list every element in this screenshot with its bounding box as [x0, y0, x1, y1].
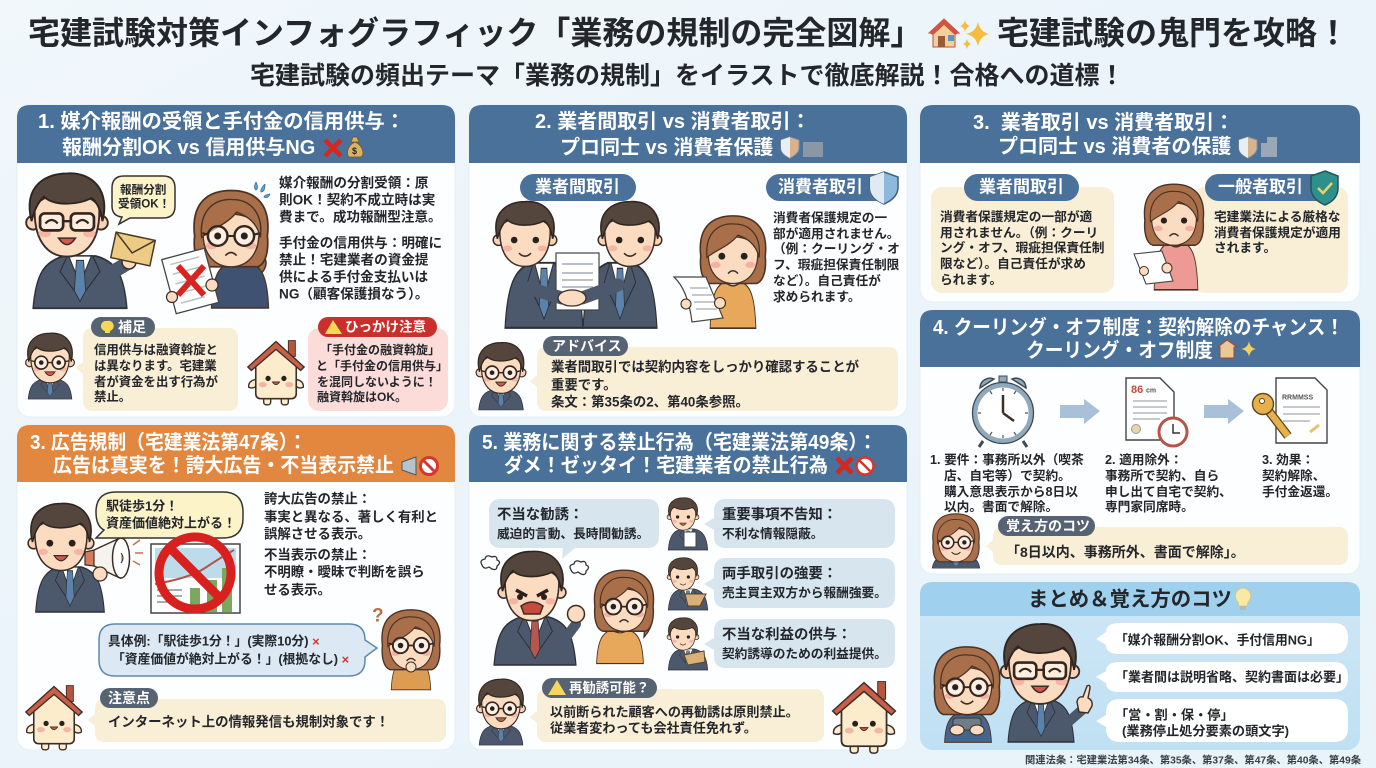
box: business transactions: ング・オフ、瑕疵担保責任制 [940, 240, 1104, 255]
heading: panel 4 [920, 310, 1360, 367]
item: improper benefit: 契約誘導のための利益提供。 [722, 646, 887, 661]
text block: step 3: 契約解除、 [1262, 468, 1325, 483]
illustration: puzzled woman: ? [372, 606, 384, 626]
heading: panel 3 right [920, 105, 1360, 163]
icon: alarm clock [972, 376, 1034, 447]
callout: memory tip [986, 516, 1348, 565]
illustration: consumer woman reading [674, 216, 766, 328]
illustration: woman and man pointing [934, 624, 1092, 742]
text block: exaggeration: 誤解させる表示。 [264, 526, 371, 542]
text block: step 3: 手付金返還。 [1262, 484, 1338, 499]
callout: memory tip: 「8日以内、事務所外、書面で解除」。 [1006, 544, 1245, 560]
callout: re-solicitation [530, 678, 824, 742]
box: business transactions [931, 174, 1114, 293]
heading: panel 3 right: プロ同士 vs 消費者の保護 [998, 135, 1231, 158]
callout: trap warning: を混同しないように！ [317, 374, 437, 389]
icon: document with clock: 86 [1131, 384, 1143, 396]
text block: exaggeration [264, 490, 438, 598]
speech bubble: undue solicitation: 威迫的言動、長時間勧誘。 [497, 526, 649, 541]
panel: 3 advertising [17, 425, 455, 750]
box: general consumer transactions: されます。 [1214, 241, 1276, 255]
callout: trap warning [308, 317, 448, 411]
heading: panel 2: プロ同士 vs 消費者保護 [560, 136, 773, 159]
illustration: woman with rejected document [162, 182, 270, 314]
heading: panel 1: $ [352, 146, 357, 156]
box: general consumer transactions [1193, 171, 1348, 293]
speech bubble: fee split OK: 報酬分割 [120, 182, 166, 196]
illustration: puzzled woman [372, 606, 440, 690]
text block: fee split and credit: 手付金の信用供与：明確に [279, 234, 442, 250]
heading: panel 4: クーリング・オフ制度 [1026, 338, 1213, 362]
item: material non-disclosure: 不利な情報隠蔽。 [722, 526, 824, 541]
item: improper benefit: 不当な利益の供与： [722, 625, 852, 643]
text block: step 1: 1. 要件：事務所以外（喫茶 [930, 452, 1084, 467]
speech bubble: advert claim: 駅徒歩1分！ [106, 498, 178, 514]
panel: 2 business vs consumer [469, 105, 907, 417]
label: business: 業者間取引 [535, 178, 620, 196]
item: forced dual agency: 売主買主双方から報酬強要。 [722, 585, 887, 600]
text block: consumer protection: フ、瑕疵担保責任制限 [773, 257, 900, 272]
heading: advertising [17, 425, 455, 482]
text block: step 2: 申し出て自宅で契約、 [1105, 484, 1232, 499]
speech bubble: undue solicitation: 不当な勧誘： [497, 505, 583, 523]
text block: step 2: 専門家同席時。 [1105, 499, 1194, 514]
text block: step 2: 事務所で契約、自ら [1105, 468, 1219, 483]
speech bubble: advert claim: 資産価値絶対上がる！ [106, 516, 236, 530]
callout: supplement: 信用供与は融資斡旋と [94, 342, 218, 357]
icon: key and document: RRMMSS [1282, 394, 1313, 402]
callout: concrete examples: 具体例:「駅徒歩1分！」(実際10分) × [108, 634, 320, 648]
text block: step 2: 2. 適用除外： [1105, 452, 1183, 467]
callout: re-solicitation: 従業者変わっても会社責任免れず。 [550, 720, 757, 736]
avatar: woman [932, 514, 980, 568]
text block: fee split and credit: NG（顧客保護損なう）。 [279, 286, 429, 302]
box: business transactions: られます。 [940, 273, 1002, 287]
callout: trap warning: と「手付金の信用供与」 [316, 358, 448, 373]
callout: memory tip: 覚え方のコツ [1006, 518, 1090, 534]
box: business transactions: 限など）。自己責任が求め [940, 256, 1086, 271]
item: material non-disclosure [667, 498, 895, 550]
label: consumer with shield: 消費者取引 [778, 178, 863, 196]
text block: step 1: 以内。書面で解除。 [944, 499, 1058, 514]
title: 宅建試験の鬼門を攻略！ [997, 15, 1349, 51]
footer: related laws: 関連法条：宅建業法第34条、第35条、第37条、第47条、第40条、第49条 [1025, 754, 1361, 766]
text block: fee split and credit [279, 174, 442, 302]
avatar: man [477, 679, 525, 745]
speech bubble: tip 3 [1096, 699, 1348, 742]
text block: fee split and credit: 費まで。成功報酬型注意。 [279, 208, 442, 224]
subtitle: 宅建試験の頻出テーマ「業務の規制」をイラストで徹底解説！合格への道標！ [250, 62, 1125, 90]
text block: fee split and credit: 供による手付金支払いは [279, 268, 429, 284]
callout: supplement: は異なります。宅建業 [94, 358, 217, 373]
heading: panel 5: 5. 業務に関する禁止行為（宅建業法第49条）： [482, 431, 877, 454]
avatar: man [476, 343, 526, 410]
label: consumer with shield [766, 172, 898, 204]
text block: exaggeration: 不当表示の禁止： [264, 546, 371, 562]
box: general consumer transactions: 宅建業法による厳格な [1214, 209, 1341, 224]
speech bubble: fee split OK [112, 176, 175, 224]
callout: trap warning: 融資斡旋はOK。 [317, 389, 407, 404]
heading: panel 2 [469, 105, 907, 163]
heading: panel 5: ダメ！ゼッタイ！宅建業者の禁止行為 [504, 453, 828, 477]
arrow [1204, 399, 1244, 424]
callout: advice [530, 336, 898, 411]
speech bubble: tip 2 [1096, 662, 1349, 692]
callout: concrete examples: 「資産価値が絶対上がる！」(根拠なし) × [112, 652, 349, 666]
text block: step 3 [1262, 453, 1338, 499]
callout: supplement: 者が資金を出す行為が [94, 374, 219, 389]
callout: supplement [76, 317, 238, 411]
box: business transactions: 消費者保護規定の一部が適 [940, 209, 1093, 224]
box: general consumer transactions: 一般者取引 [1218, 178, 1303, 196]
illustration: man with envelope [26, 173, 155, 308]
callout: caution: 注意点 [108, 690, 150, 706]
text block: step 3: 3. 効果： [1262, 453, 1314, 467]
avatar: man [26, 333, 74, 399]
text block: fee split and credit: 媒介報酬の分割受領：原 [279, 174, 429, 190]
text block: exaggeration: 事実と異なる、著しく有利と [264, 508, 438, 524]
callout: concrete examples [99, 624, 377, 676]
callout: supplement: 禁止。 [94, 389, 131, 404]
text block: step 1: 購入意思表示から8日以 [944, 484, 1078, 499]
panel: summary [920, 582, 1360, 750]
text block: step 2 [1105, 452, 1232, 514]
title: 宅建試験対策インフォグラフィック「業務の規制の完全図解」 [28, 15, 922, 51]
callout: advice: 条文：第35条の2、第40条参照。 [551, 394, 749, 410]
speech bubble: undue solicitation [489, 499, 659, 559]
callout: advice: アドバイス [552, 338, 622, 354]
illustration: woman with paper [1134, 184, 1204, 290]
heading: advertising: 広告は真実を！誇大広告・不当表示禁止 [53, 454, 394, 477]
box: business transactions: 用されません。（例：クーリ [940, 226, 1098, 240]
text block: exaggeration: せる表示。 [264, 582, 331, 598]
callout: trap warning: ひっかけ注意 [345, 318, 426, 334]
callout: caution [88, 688, 446, 742]
panel: 1 brokerage fee [17, 105, 455, 417]
speech bubble: tip 3: (業務停止処分要素の頭文字) [1122, 722, 1289, 738]
speech bubble: tip 1: 「媒介報酬分割OK、手付信用NG」 [1115, 632, 1320, 648]
box: general consumer transactions: 消費者保護規定が適用 [1214, 225, 1341, 240]
heading: summary [920, 582, 1360, 616]
icon: document with clock [1126, 378, 1187, 446]
item: improper benefit [667, 618, 895, 670]
text block: consumer protection: 消費者保護規定の一 [773, 210, 887, 225]
item: forced dual agency [667, 558, 895, 610]
heading: panel 3 right: 3. 業者取引 vs 消費者取引： [973, 111, 1234, 134]
text block: consumer protection: 部が適用されません。 [773, 226, 900, 241]
speech bubble: tip 3: 「営・割・保・停」 [1115, 706, 1234, 722]
callout: re-solicitation: 以前断られた顧客への再勧誘は原則禁止。 [550, 704, 799, 720]
icon: house and sparkles [929, 19, 989, 49]
illustration: two businessmen shaking hands [493, 202, 662, 328]
item: forced dual agency: 両手取引の強要： [722, 565, 837, 582]
heading: panel 1: 1. 媒介報酬の受領と手付金の信用供与： [38, 110, 405, 133]
panel: 4 cooling off [920, 310, 1360, 574]
illustration: angry man [481, 551, 588, 665]
illustration: prohibited advert [151, 537, 240, 613]
callout: caution: インターネット上の情報発信も規制対象です！ [108, 714, 389, 730]
text block: consumer protection [773, 210, 900, 304]
arrow [1060, 399, 1100, 424]
heading: panel 4: 4. クーリング・オフ制度：契約解除のチャンス！ [933, 315, 1344, 339]
callout: advice: 業者間取引では契約内容をしっかり確認することが [551, 358, 860, 374]
title [28, 15, 1349, 51]
icon: key and document [1252, 378, 1327, 443]
speech bubble: tip 1 [1096, 623, 1348, 654]
text block: consumer protection: など）。自己責任が [773, 273, 881, 288]
text block: fee split and credit: 則OK！契約不成立時は実 [279, 192, 435, 208]
text block: exaggeration: 不明瞭・曖昧で判断を誤ら [264, 564, 425, 580]
text block: consumer protection: 求められます。 [773, 289, 861, 304]
box: business transactions: 業者間取引 [979, 178, 1064, 196]
panel: 5 prohibited acts [469, 425, 907, 753]
panel: 3 trader vs consumer (right) [920, 105, 1360, 302]
illustration: man with megaphone [28, 503, 143, 612]
text block: consumer protection: （例：クーリング・オ [773, 241, 900, 256]
text block: exaggeration: 誇大広告の禁止： [264, 490, 371, 506]
label: business [520, 174, 636, 201]
icon: house character [833, 682, 895, 753]
callout: advice: 重要です。 [551, 378, 617, 392]
item: material non-disclosure: 重要事項不告知： [722, 505, 837, 523]
callout: trap warning: 「手付金の融資斡旋」 [320, 342, 440, 357]
text block: fee split and credit: 禁止！宅建業者の資金提 [279, 252, 429, 268]
speech bubble: advert claim [96, 492, 243, 538]
text block: step 1 [930, 452, 1084, 514]
heading: summary: まとめ＆覚え方のコツ [1028, 588, 1232, 611]
callout: supplement: 補足 [118, 319, 146, 335]
callout: re-solicitation: 再勧誘可能？ [569, 680, 649, 696]
heading: panel 1: 報酬分割OK vs 信用供与NG [62, 136, 315, 159]
icon: document with clock: cm [1146, 388, 1156, 394]
heading: advertising: 3. 広告規制（宅建業法第47条）： [30, 431, 307, 454]
illustration: worried woman [594, 570, 654, 664]
speech bubble: fee split OK: 受領OK！ [118, 196, 170, 210]
text block: step 1: 店、自宅等）で契約。 [944, 468, 1071, 483]
icon: house character [248, 341, 304, 405]
heading: panel 2: 2. 業者間取引 vs 消費者取引： [535, 110, 811, 133]
speech bubble: tip 2: 「業者間は説明省略、契約書面は必要」 [1115, 670, 1349, 684]
heading: panel 5 [469, 425, 907, 482]
heading: panel 1 [17, 105, 455, 163]
icon: house character [26, 686, 82, 750]
